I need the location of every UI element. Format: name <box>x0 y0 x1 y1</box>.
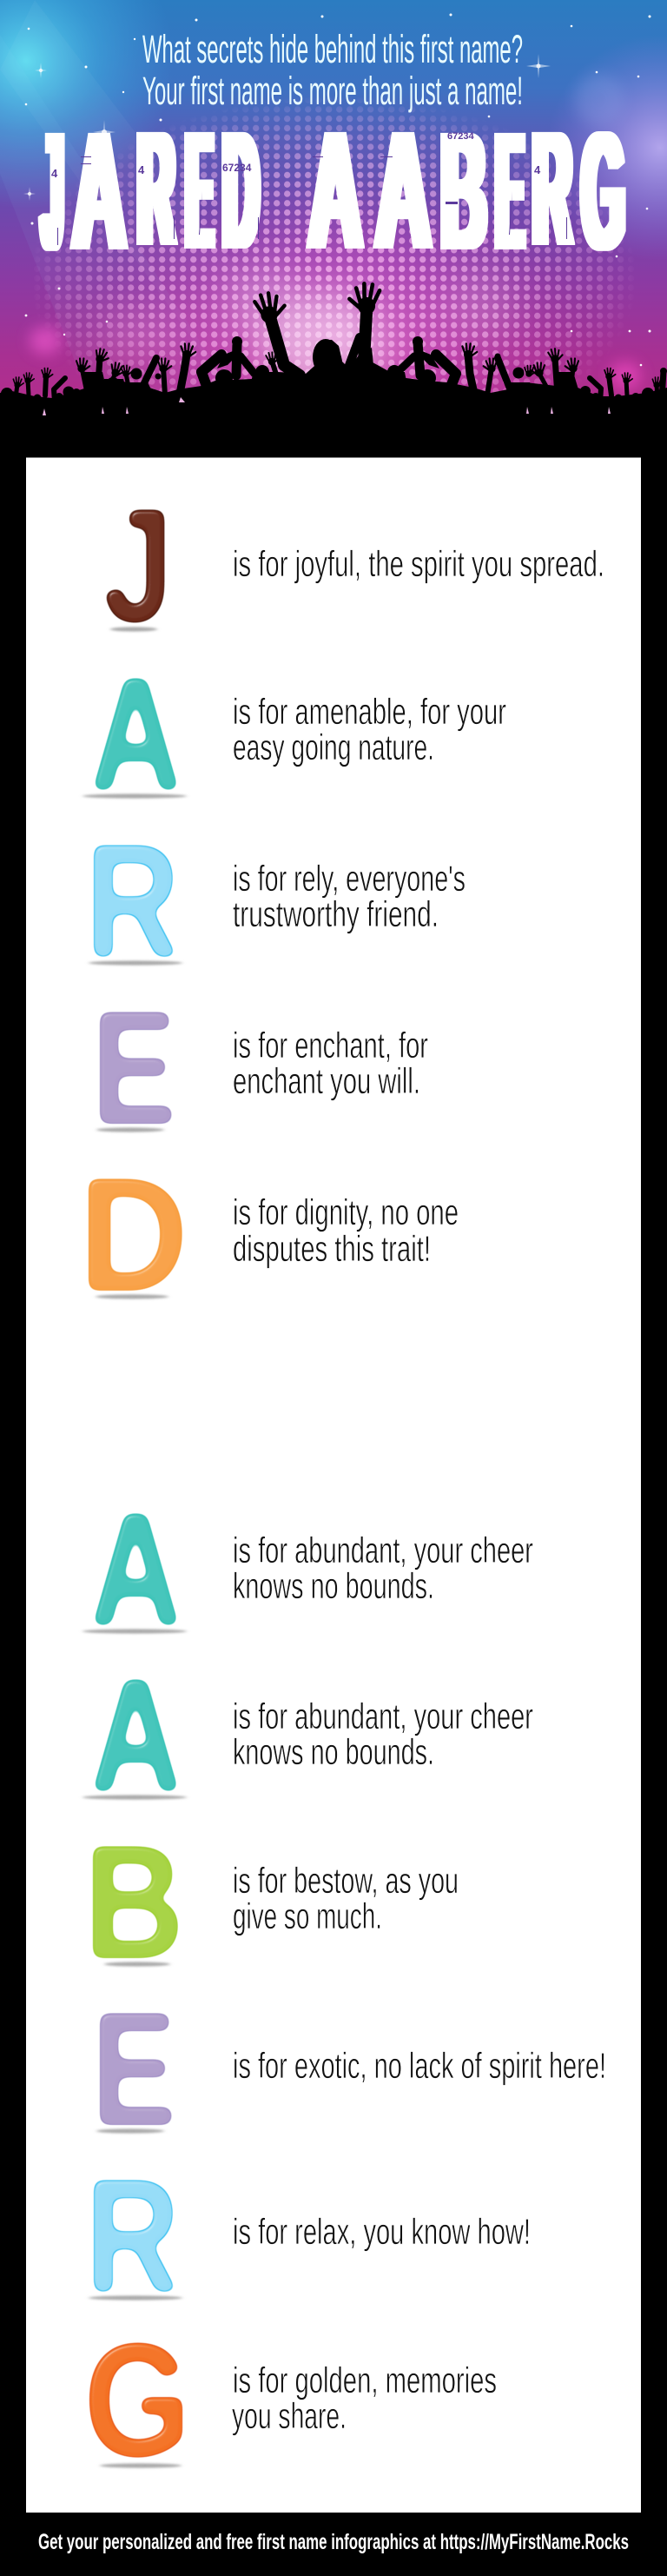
row: E is for exotic <box>91 1977 606 2160</box>
title: JARED AABERG: A <box>73 99 126 284</box>
icon: gel letter J: J <box>102 475 173 656</box>
row: D is for dignity <box>78 1145 459 1325</box>
tagline <box>142 27 523 113</box>
text: golden: you share. <box>232 2395 347 2436</box>
text: bestow: is for bestow, as you <box>233 1860 459 1901</box>
row: R is for relax <box>85 2146 531 2327</box>
text: dignity: is for dignity, no one <box>233 1192 459 1232</box>
text: abundant: knows no bounds. <box>233 1731 434 1772</box>
crowd silhouette <box>0 282 667 457</box>
row: A is for abundant (second) <box>83 1643 533 1826</box>
title: JARED AABERG: J <box>42 98 63 284</box>
text: rely: is for rely, everyone's <box>233 858 466 899</box>
icon: gel letter R: R <box>85 811 180 993</box>
header: concert background <box>0 0 667 435</box>
text: rely <box>233 858 466 934</box>
text: relax: is for relax, you know how! <box>233 2211 531 2252</box>
title: JARED AABERG: A <box>375 96 431 283</box>
icon: gel letter A: A <box>89 1643 182 1826</box>
text: enchant: enchant you will. <box>233 1060 420 1101</box>
text: amenable: is for amenable, for your <box>233 691 506 732</box>
text: golden: is for golden, memories <box>233 2360 497 2400</box>
icon: gel letter G: G <box>83 2309 191 2491</box>
title: JARED AABERG: R <box>533 98 571 279</box>
text: amenable: easy going nature. <box>233 727 434 767</box>
row: A is for amenable <box>83 642 506 825</box>
title distress marks: 4 <box>534 163 541 176</box>
text: abundant: is for abundant, your cheer <box>233 1530 533 1570</box>
text: golden <box>232 2360 497 2436</box>
text: abundant: knows no bounds. <box>233 1565 434 1606</box>
title: JARED AABERG: B <box>441 98 486 284</box>
icon: gel letter A: A <box>89 642 182 825</box>
text: dignity: disputes this trait! <box>233 1228 431 1269</box>
text: enchant <box>233 1025 428 1101</box>
text: rely: trustworthy friend. <box>233 893 439 934</box>
row: R is for rely <box>85 811 466 993</box>
text: abundant <box>233 1696 533 1772</box>
row: E is for enchant <box>91 976 428 1159</box>
text: abundant: is for abundant, your cheer <box>233 1696 533 1736</box>
title distress marks: 67234 <box>222 162 252 174</box>
white content panel <box>26 457 641 2513</box>
icon: gel letter B: B <box>83 1811 184 1993</box>
text: bestow <box>233 1860 459 1936</box>
title distress marks: 67234 <box>447 131 474 142</box>
text: bestow: give so much. <box>233 1895 382 1936</box>
text: abundant <box>233 1530 533 1606</box>
title distress marks <box>51 131 567 245</box>
icon: gel letter E: E <box>91 976 177 1159</box>
title distress marks: 4 <box>51 167 58 180</box>
title: JARED AABERG: R <box>138 99 175 279</box>
title: JARED AABERG: G <box>582 99 624 285</box>
text: amenable <box>233 691 506 767</box>
title: JARED AABERG: A <box>309 98 362 283</box>
title distress marks: 4 <box>138 163 145 176</box>
title: JARED AABERG: E <box>496 97 524 284</box>
icon: gel letter A: A <box>89 1477 182 1660</box>
row: J is for joyful <box>102 475 604 656</box>
icon: gel letter R: R <box>85 2146 180 2327</box>
row: A is for abundant <box>83 1477 533 1660</box>
row: B is for bestow <box>83 1811 459 1993</box>
text: dignity <box>233 1192 459 1269</box>
icon: gel letter D: D <box>78 1145 188 1325</box>
title: JARED AABERG: D <box>223 98 259 284</box>
title: JARED AABERG: E <box>186 97 213 283</box>
row: G is for golden <box>83 2309 497 2491</box>
title: JARED AABERG <box>42 96 624 285</box>
icon: gel letter E: E <box>91 1977 177 2160</box>
text: enchant: is for enchant, for <box>233 1025 428 1066</box>
